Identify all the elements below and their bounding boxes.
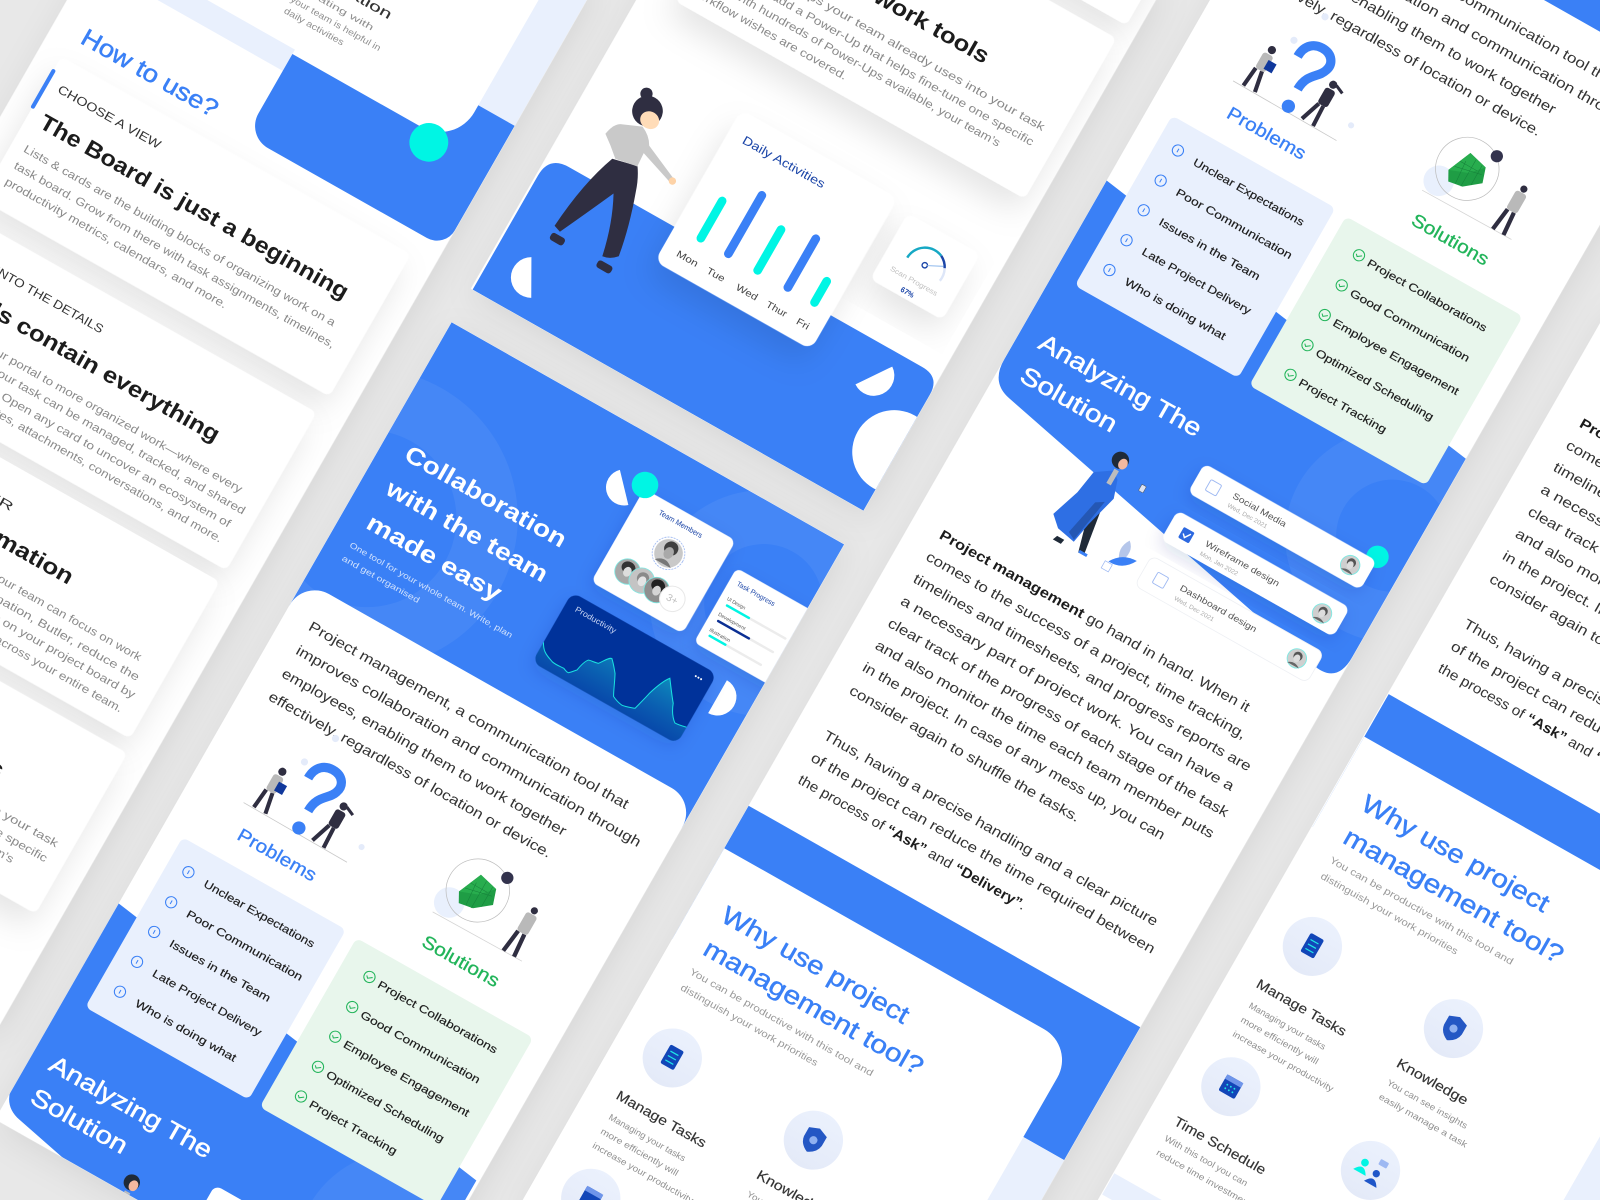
- intro paragraph: employees, enabling them to work together: [279, 666, 569, 840]
- heading: analyzing the solution: Analyzing The: [1034, 329, 1206, 443]
- panel: page column B top, footer illustration: [471, 0, 1156, 511]
- feature: time schedule: With this tool you can: [1163, 1133, 1249, 1188]
- white content card: [290, 590, 686, 828]
- hero decorative rings: [292, 378, 844, 714]
- card: daily activities: Fri: [794, 316, 811, 333]
- blue footer block: [473, 156, 940, 511]
- blue band: [1313, 694, 1600, 1049]
- collaboration feature text: [284, 0, 390, 51]
- body paragraphs: consider again to shuffle the tasks.: [846, 683, 1082, 826]
- card: daily activities: Thur: [764, 299, 790, 320]
- panel: problems list: Issues in the Team: [167, 938, 272, 1005]
- card: choose a view: task board. Grow from there with task assignments, timelines,: [12, 160, 336, 351]
- panel: solutions list: Project Collaborations: [375, 979, 500, 1057]
- hero subtitle: and get organised: [340, 553, 422, 605]
- white content card top: [1117, 0, 1600, 384]
- feature: manage tasks: more efficiently will: [1239, 1015, 1320, 1066]
- body paragraphs: in the project. In case of any mess up, you can: [859, 660, 1168, 844]
- body paragraphs: Thus, having a precise handling and a clear picture: [820, 728, 1161, 930]
- card: wireframe design: [1161, 510, 1350, 637]
- card: team members: Team Members: [657, 508, 704, 540]
- heading: why use project management tool: management tool?: [698, 935, 928, 1081]
- body paragraphs: [795, 527, 1285, 980]
- panel: solutions list: Employee Engagement: [1330, 317, 1461, 398]
- card: task progress: [696, 570, 808, 689]
- heading: solutions: Solutions: [418, 931, 504, 991]
- card: automation: [0, 458, 216, 748]
- why-use subtitle: distinguish your work priorities: [678, 983, 820, 1069]
- body paragraphs: the process of “Ask” and “Delivery”.: [795, 772, 1029, 914]
- card: into the details: [0, 216, 317, 570]
- white half disc lower: [708, 680, 736, 716]
- card: wireframe design: Mon, Jan 2022: [1198, 550, 1240, 578]
- body paragraphs: [1435, 415, 1600, 868]
- teal dot: [1362, 542, 1393, 572]
- body paragraphs: a necessary part of project work. You can have a: [897, 593, 1237, 795]
- heading: analyzing the solution: [1015, 329, 1206, 475]
- panel: problems list: Late Project Delivery: [1140, 246, 1253, 318]
- intro paragraph: effectively, regardless of location or device.: [265, 689, 554, 862]
- heading: why use project management tool: [698, 901, 947, 1081]
- intro paragraph: [265, 619, 657, 897]
- card: task progress: UI Design: [726, 596, 746, 612]
- why-use subtitle: You can be productive with this tool and: [687, 967, 875, 1079]
- heading: analyzing the solution: Solution: [1015, 362, 1122, 438]
- panel: problems list: Late Project Delivery: [150, 968, 264, 1039]
- heading: why use project management tool: [1338, 790, 1587, 969]
- panel: page column A, how to use: [0, 0, 595, 1030]
- light strip on the right: [478, 0, 595, 127]
- feature: manage tasks: more efficiently will: [599, 1126, 680, 1178]
- feature: manage tasks: Manage Tasks: [614, 1088, 709, 1151]
- card: task progress: Task Progress: [735, 580, 777, 608]
- panel: problems list: Poor Communication: [184, 908, 305, 984]
- card: wireframe design: Wireframe design: [1204, 538, 1281, 588]
- panel: solutions list: [1249, 216, 1523, 485]
- panel: page column C, analyzing and why use: [518, 0, 1600, 1200]
- feature: knowledge: Knowledge: [1394, 1056, 1471, 1108]
- card: choose a view: [0, 56, 410, 396]
- collaboration feature text: daily activities: [282, 6, 346, 48]
- panel: solutions list: Good Communication: [358, 1009, 482, 1086]
- card: task progress: Illustration: [708, 627, 731, 644]
- hero title: with the team: [380, 475, 553, 588]
- card: social media: Social Media: [1231, 491, 1288, 529]
- bar chart: [696, 191, 831, 307]
- heading: analyzing the solution: Solution: [26, 1084, 132, 1160]
- illustration: standing girl: [550, 88, 676, 274]
- panel: problems list: Issues in the Team: [1157, 216, 1262, 283]
- card: dashboard design: Dashboard design: [1178, 583, 1259, 634]
- panel: solutions list: [260, 938, 533, 1200]
- panel: problems list: [85, 837, 346, 1100]
- hero title: made easy: [362, 509, 507, 607]
- heading: problems: Problems: [1223, 102, 1310, 164]
- white why-use card: [518, 848, 1075, 1200]
- task card: [198, 1185, 387, 1200]
- card: scan progress gauge: 67%: [899, 285, 916, 300]
- card: work tools: [676, 0, 1116, 199]
- feature: time schedule: Time Schedule: [1171, 1114, 1269, 1178]
- feature: manage tasks: [587, 1018, 765, 1200]
- heading: why use project management tool: Why use project: [716, 901, 914, 1030]
- why-use subtitle: distinguish your work priorities: [1318, 871, 1460, 958]
- body paragraphs: clear track of the progress of each stage of the task: [885, 616, 1232, 821]
- light strip on right: [1440, 1025, 1600, 1200]
- body paragraphs: Project management go hand in hand. When it: [936, 527, 1253, 716]
- feature: manage tasks: increase your productivity: [1231, 1029, 1336, 1094]
- panel: solutions list: Project Tracking: [307, 1099, 399, 1158]
- card: dashboard design: Wed, Dec 2021: [1173, 595, 1216, 624]
- hero subtitle: [342, 543, 512, 638]
- decorative ring: [1246, 390, 1539, 681]
- white half disc left: [511, 257, 531, 298]
- card: dashboard design: [1135, 555, 1324, 683]
- illustration: solutions cube: [428, 846, 557, 962]
- light band above how to use: [158, 0, 295, 70]
- panel: problems list: Unclear Expectations: [201, 878, 317, 951]
- heading: solutions: Solutions: [1408, 209, 1493, 269]
- feature: knowledge: [744, 1099, 881, 1200]
- intro paragraph: Project management, a communication tool that: [305, 619, 631, 813]
- panel: problems list: Poor Communication: [1174, 187, 1294, 262]
- heading: why use project management tool: Why use project: [1356, 790, 1554, 918]
- feature: knowledge: easily manage a task: [1377, 1092, 1470, 1150]
- heading: analyzing the solution: Analyzing The: [44, 1051, 217, 1164]
- feature: manage tasks: Managing your tasks: [1247, 1000, 1328, 1052]
- white why-use card: [1085, 737, 1600, 1200]
- panel: page column D, body and why use: [1085, 302, 1600, 1200]
- blue corner block: [255, 54, 515, 241]
- card: choose a view: CHOOSE A VIEW: [55, 82, 164, 152]
- heading: problems: Problems: [234, 824, 321, 885]
- why-use subtitle: You can be productive with this tool and: [1327, 855, 1515, 968]
- card: choose a view: productivity metrics, calendars, and more.: [3, 176, 229, 311]
- illustration: problems question mark: [1232, 0, 1396, 145]
- card: daily activities: Tue: [704, 266, 727, 285]
- card: daily activities: [655, 110, 898, 350]
- panel: solutions list: Optimized Scheduling: [324, 1069, 446, 1145]
- body paragraphs: comes to the success of a project, time tracking,: [923, 549, 1249, 743]
- hero title: Collaboration: [400, 441, 571, 553]
- intro paragraph: [1255, 0, 1600, 176]
- chart card: productivity: [530, 591, 717, 744]
- light band at bottom: [1102, 1173, 1306, 1200]
- card: daily activities: Daily Activities: [740, 133, 828, 191]
- card: social media: [1188, 463, 1377, 590]
- heading: how to use: How to use?: [76, 24, 223, 123]
- light strip on right: [871, 1137, 1064, 1200]
- illustration: woman in blue coat: [1042, 437, 1181, 581]
- blue band: [673, 806, 1140, 1160]
- panel: solutions list: Optimized Scheduling: [1313, 347, 1436, 424]
- analyzing blue section: [0, 902, 509, 1200]
- card: scan progress gauge: [866, 234, 968, 330]
- card: social media: Wed, Dec 2021: [1226, 502, 1269, 531]
- illustration: problems question mark: [243, 712, 407, 867]
- feature: knowledge: [1376, 987, 1529, 1150]
- card: scan progress gauge: Scan Progress: [889, 265, 939, 298]
- feature: manage tasks: [1227, 906, 1405, 1094]
- teal dot: [632, 472, 658, 498]
- feature: manage tasks: Managing your tasks: [607, 1112, 688, 1164]
- white half disc right: [856, 366, 894, 396]
- panel: solutions list: Project Collaborations: [1365, 257, 1489, 335]
- card: choose a view: The Board is just a beginning: [35, 110, 353, 304]
- panel: problems list: Who is doing what: [1122, 276, 1228, 343]
- card: daily activities: Mon: [674, 249, 700, 270]
- card: choose a view: Lists & cards are the building blocks of organizing work on a: [21, 143, 338, 330]
- feature: knowledge: You can see insights: [1385, 1077, 1470, 1131]
- hero subtitle: One tool for your whole team. Write, plan: [348, 540, 515, 640]
- body paragraphs: timelines and timesheets, and progress reports are: [910, 571, 1254, 775]
- why-use subtitle: [678, 967, 875, 1095]
- feature: manage tasks: increase your productivity: [591, 1140, 696, 1200]
- panel: solutions list: Good Communication: [1347, 288, 1472, 365]
- upper card edge: [1050, 0, 1148, 36]
- card: team members: [591, 489, 736, 634]
- illustration: woman head: [112, 1171, 143, 1200]
- panel: page column B, hero and problems: [0, 322, 844, 1200]
- heading: analyzing the solution: [26, 1051, 217, 1197]
- panel: problems list: Unclear Expectations: [1191, 157, 1306, 229]
- panel: problems list: Who is doing what: [133, 998, 238, 1065]
- heading: why use project management tool: management tool?: [1339, 823, 1568, 969]
- body paragraphs: and also monitor the time each team member puts: [872, 638, 1217, 842]
- teal dot: [409, 123, 448, 162]
- analyzing blue section: [947, 181, 1498, 681]
- hero remainder: [1277, 0, 1600, 105]
- body paragraphs: of the project can reduce the time required between: [808, 750, 1158, 957]
- feature: time schedule: [1155, 1045, 1312, 1200]
- card: daily activities: Wed: [734, 282, 760, 303]
- card: work tools: [0, 682, 118, 924]
- hero blue background: [289, 322, 844, 828]
- white half disc: [606, 470, 628, 506]
- intro paragraph: improves collaboration and communication through: [293, 643, 644, 851]
- feature: time schedule icon: [550, 1158, 631, 1200]
- hero title: [366, 448, 564, 601]
- white circle: [852, 410, 917, 490]
- why-use subtitle: [1318, 855, 1515, 984]
- feature: manage tasks: Manage Tasks: [1254, 976, 1349, 1039]
- card: task progress: Development: [717, 612, 747, 632]
- panel: solutions list: Employee Engagement: [341, 1039, 471, 1120]
- feature: collaboration icon: [1330, 1130, 1411, 1200]
- chart card: productivity: Productivity: [573, 605, 619, 636]
- panel: solutions list: Project Tracking: [1296, 377, 1388, 436]
- panel: problems list: [1075, 116, 1335, 378]
- illustration: solutions cube: [1417, 125, 1547, 240]
- card: team members: 3+: [664, 592, 680, 608]
